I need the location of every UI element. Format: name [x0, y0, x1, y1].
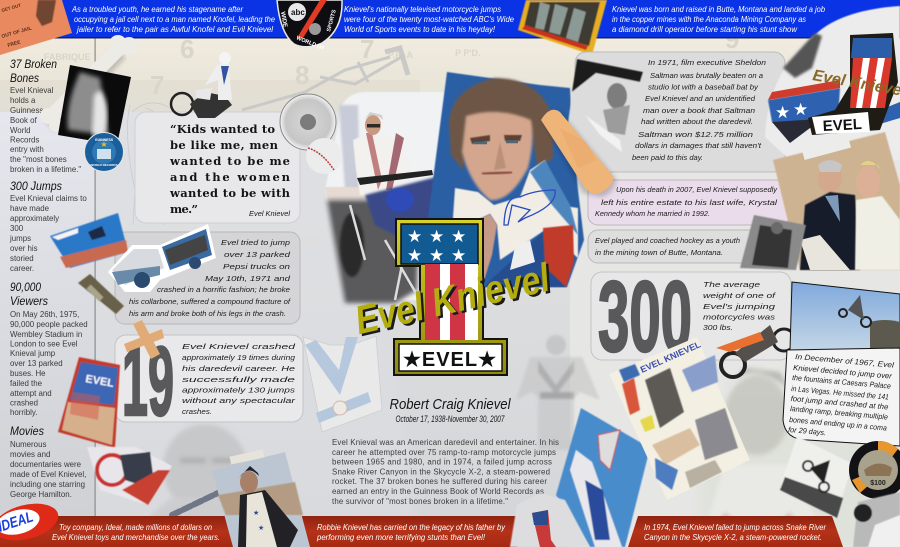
stat: 300: 300 — [598, 261, 692, 373]
text: biography: between 1965 and 1980, and in 1974, a failed jump across — [332, 458, 552, 466]
logo: Evel number 1: ★ — [407, 246, 422, 265]
stat block: viewers — [10, 282, 88, 417]
icon: bandage across portrait — [541, 110, 616, 197]
text: Saltman beating: studio lot with a baseball bat by — [648, 82, 759, 92]
ghost: caped stunt figure — [516, 335, 600, 450]
stat block: jumps: 300 — [10, 224, 24, 233]
icon: bone — [40, 35, 138, 132]
stat block: viewers: 90,000 — [10, 282, 42, 294]
stat block: movies: Movies — [10, 426, 44, 438]
text: Pepsi jump: his collarbone, suffered a compound fracture of — [129, 297, 291, 306]
stat block: jumps — [9, 181, 87, 273]
top banner text: stage name: As a troubled youth, he earned his stagename after — [71, 5, 243, 14]
stat block: viewers: On May 26th, 1975, — [10, 310, 79, 319]
quote text: “Kids wanted to — [170, 122, 275, 136]
logo: Evel number 1 — [351, 218, 557, 376]
text: biography — [332, 438, 559, 506]
icon: Wide World of Sports badge: WIDE — [279, 11, 288, 28]
photo: jump over cars — [780, 436, 853, 518]
text: hockey: Evel played and coached hockey as a youth — [595, 236, 740, 245]
panel: 19 crashes — [115, 326, 303, 436]
photo: wedding — [773, 132, 900, 270]
icon: silver hubcap — [280, 94, 336, 150]
stat block: viewers: buses. He — [10, 369, 46, 378]
stat block: viewers: 90,000 people packed — [10, 320, 88, 329]
background: P.R. A — [388, 50, 414, 60]
text: crashes: Evel Knievel crashed — [182, 342, 296, 351]
text: biography: earned an entry in the Guinness Book of World Records as — [332, 487, 544, 496]
stat block: broken bones: Evel Knieval — [10, 86, 54, 95]
text column: left statistics — [9, 59, 88, 499]
text: motorcycle weight: weight of one of — [703, 291, 776, 300]
icon: toy Pepsi truck — [108, 224, 216, 292]
stat block: movies: made of Evel Knievel, — [10, 470, 86, 479]
bottom text: Robbie Knievel — [316, 523, 506, 542]
photo: Robbie Knievel: ★ — [258, 524, 264, 532]
text: Caesars Palace jump: landing ramp, breaking multiple — [790, 404, 888, 422]
text: Saltman beating: Saltman was brutally beaten on a — [650, 71, 763, 80]
stat block: viewers: over 13 parked — [10, 359, 63, 368]
text: Pepsi jump: May 10th, 1971 and — [205, 274, 291, 283]
panel: hockey — [588, 230, 778, 263]
icon: DVD covers — [58, 357, 172, 505]
text: Saltman beating: had written about the daredevil. — [641, 117, 753, 126]
text: Saltman beating: In 1971, film executive Sheldon — [648, 58, 766, 67]
text: crashes: his daredevil career. He — [182, 364, 295, 373]
stat block: broken bones: the "most bones — [10, 155, 67, 164]
stat block: broken bones: Bones — [10, 73, 39, 85]
bottom text: Robbie Knievel: performing even more terrifying stunts than Evel! — [316, 533, 486, 542]
panel: 19 crashes: 19 — [122, 326, 174, 436]
stat block: broken bones: Book of — [10, 116, 38, 125]
text: last wife: Upon his death in 2007, Evel Knievel supposedly — [616, 185, 778, 194]
text: Saltman beating: man over a book that Saltman — [643, 106, 755, 115]
logo: Evel number 1: ★ — [407, 227, 422, 246]
stat block: jumps: storied — [10, 254, 34, 263]
top banner text: Butte: Knievel was born and raised in Butte, Montana and landed a job — [612, 5, 826, 14]
heading: Robert Craig Knievel: Robert Craig Knievel — [390, 396, 511, 413]
panel: quote — [135, 112, 300, 223]
bottom text: Ideal toys: Evel Knievel toys and merchandise over the years. — [52, 533, 220, 542]
text: biography: rocket. The 37 broken bones he suffered during his career — [332, 477, 547, 486]
stat block: jumps: career. — [10, 264, 34, 273]
top banner text: Wide World of Sports: Knievel's nationally televised motorcycle jumps — [344, 5, 501, 14]
background: FABRIQUE — [44, 52, 91, 62]
stat block: broken bones: World — [10, 126, 30, 135]
icon: Wide World of Sports badge: WORLD OF — [295, 35, 326, 52]
photo: cape with number 1 — [510, 493, 590, 547]
quote text: wanted to be me — [169, 154, 290, 168]
top banner text: stage name: jailer to refer to the pair as Awful Knofel and Evil Knievel — [76, 25, 273, 34]
photo: Skycycle rocket — [556, 408, 650, 547]
text: Saltman beating — [632, 58, 766, 162]
stat block: movies: Numerous — [10, 440, 46, 449]
stat block: broken bones: Records — [10, 136, 39, 144]
heading: Robert Craig Knievel — [390, 396, 511, 425]
top banner text: Wide World of Sports: were four of the twenty most-watched ABC's Wide — [344, 15, 515, 24]
photo: old Evel on motorcycle — [325, 92, 445, 303]
main portrait — [428, 72, 584, 287]
photo: Saltman in hospital — [567, 59, 643, 155]
bottom text: Ideal toys — [52, 523, 220, 542]
stat block: jumps: have made — [10, 204, 50, 213]
quote attribution: Evel Knievel — [249, 209, 290, 218]
icon: helmet: EVEL — [822, 116, 862, 135]
stat block: viewers: Wembley Stadium in — [10, 330, 82, 339]
stat block: movies: documentaries were — [10, 460, 82, 469]
text: Caesars Palace jump: for 29 days. — [788, 425, 826, 437]
text: Saltman beating: been paid to this day. — [632, 153, 703, 162]
panel: Caesars Palace text — [783, 348, 900, 446]
icon: spark plug — [78, 274, 124, 314]
DVD cover: Evel Knievel: EVEL — [84, 373, 115, 390]
quote text: be like me, men — [170, 138, 279, 152]
stat block: movies: including one starring — [10, 480, 85, 489]
stat block: viewers: London to see Evel — [10, 340, 78, 348]
photo: hockey — [740, 215, 806, 270]
text: crashes: without any spectacular — [182, 396, 296, 405]
text: Caesars Palace jump — [788, 352, 895, 437]
text: Caesars Palace jump: In December of 1967, Evel — [795, 352, 895, 370]
stat block: jumps: Evel Knieval claims to — [10, 194, 87, 203]
EVEL plate: ★EVEL★ — [403, 349, 497, 371]
top banner — [50, 0, 900, 38]
text: Saltman beating: Saltman won $12.75 million — [638, 130, 753, 139]
stat block: broken bones: entry with — [10, 145, 44, 154]
text: crashes: successfully made — [182, 375, 295, 384]
comic: Stories of Evel Knievel: EVEL KNIEVEL — [639, 339, 703, 375]
icon: get out of jail ticket: OUT OF JAIL — [1, 26, 32, 40]
text: motorcycle weight: Evel's jumping — [703, 302, 776, 311]
photo: Caesars Palace jump — [790, 282, 900, 350]
background: 7 — [150, 70, 164, 100]
text: crashes — [182, 342, 296, 416]
stat block: jumps: jumps — [9, 234, 31, 243]
stat block: broken bones: broken in a lifetime." — [10, 165, 81, 174]
icon: Ideal logo — [0, 498, 62, 546]
text: Pepsi jump: Evel tried to jump — [221, 238, 290, 247]
stat block: viewers: crashed — [10, 398, 38, 408]
DVD cover: Evel Knievel — [58, 357, 120, 448]
ghost: pencil face sketch — [128, 103, 170, 225]
icon: Guinness World Records seal — [84, 132, 124, 172]
stat block: viewers: attempt and — [10, 389, 52, 398]
icon: Guinness World Records seal: WORLD RECORDS — [90, 163, 118, 167]
icon: Guinness World Records seal: GUINNESS — [95, 138, 114, 142]
text: motorcycle weight: 300 lbs. — [703, 323, 733, 332]
icon: Wide World of Sports badge — [277, 0, 342, 52]
icon: Guinness World Records seal: ★ — [100, 140, 108, 149]
stat block: viewers: Knieval jump — [10, 349, 56, 358]
icon: Caesars Palace chip — [849, 441, 900, 499]
panel: 300 lbs — [591, 261, 791, 373]
stat block: movies: George Hamilton. — [10, 490, 72, 499]
text: biography: Snake River Canyon in the Skycycle X-2, a steam-powered — [332, 468, 550, 476]
text: motorcycle weight: The average — [703, 280, 760, 289]
text: last wife: left his entire estate to his last wife, Krystal — [601, 198, 777, 207]
ghost: Evel face lower right — [700, 368, 830, 547]
stat block: viewers: failed the — [10, 379, 43, 388]
icon: baseball — [306, 138, 342, 174]
icon: Caesars Palace chip: $100 — [870, 480, 886, 487]
icon: bicycle chain — [172, 492, 220, 515]
stat block: jumps: approximately — [10, 214, 59, 223]
stat block: movies — [10, 426, 86, 499]
photo: jump over buses — [50, 213, 128, 268]
background: 9 — [725, 24, 739, 54]
DVD cover: Evel Knievel motorcycle — [87, 447, 172, 505]
icon: toy motorcycle rider — [171, 52, 232, 118]
text: Caesars Palace jump: Knievel decided to jump over — [793, 363, 893, 381]
background: 6 — [180, 34, 194, 64]
text: Pepsi jump: Pepsi trucks on — [223, 262, 290, 271]
icon: get out of jail ticket: FREE — [7, 39, 22, 49]
text: Pepsi jump: crashed in a horrific fashion; he broke — [157, 285, 290, 294]
text: hockey: in the mining town of Butte, Montana. — [595, 248, 723, 257]
text: biography: Evel Knieval was an American daredevil and entertainer. In his — [332, 438, 559, 447]
text: biography: the survivor of "most bones broken in a lifetime." — [332, 497, 508, 506]
icon: helmet — [765, 6, 900, 160]
bottom text: Robbie Knievel: Robbie Knievel has carried on the legacy of his father by — [317, 523, 506, 532]
top banner text: Butte — [612, 5, 826, 34]
top banner text: Wide World of Sports — [344, 5, 515, 34]
logo: Evel number 1: ★ — [429, 227, 444, 246]
text: Caesars Palace jump: bones and ending up in a coma — [789, 415, 887, 433]
script logotype: Evel Knievel — [351, 256, 555, 343]
text: motorcycle weight: motorcycles was — [703, 312, 775, 322]
text: last wife — [595, 185, 778, 218]
panel: last wife — [588, 180, 790, 225]
logo: Evel number 1: ★ — [451, 227, 466, 246]
text: Caesars Palace jump: in Las Vegas. He missed the 141 — [791, 384, 889, 402]
top banner text: Butte: a diamond drill operator before starting his stunt show — [612, 25, 798, 34]
text: Saltman beating: dollars in damages that still haven't — [635, 141, 762, 150]
text: Caesars Palace jump: the fountains at Caesars Palace — [792, 373, 891, 391]
icon: helmet: ★ — [775, 103, 790, 122]
text: Pepsi jump: his arm and broke both of his legs in the crash. — [129, 309, 286, 318]
icon: get out of jail ticket — [0, 0, 72, 55]
stat block: viewers: horribly. — [10, 408, 37, 417]
text: last wife: Kennedy whom he married in 1992. — [595, 209, 710, 218]
background: 8 — [295, 60, 309, 90]
text: Pepsi jump — [129, 238, 291, 318]
script logotype: Evel Knievel — [353, 258, 557, 345]
quote text: wanted to be with — [169, 186, 291, 200]
text: crashes: approximately 130 jumps — [182, 386, 295, 394]
logo: Evel number 1: ★ — [451, 246, 466, 265]
icon: helmet: ★ — [793, 100, 808, 119]
stat block: broken bones: 37 Broken — [10, 59, 57, 71]
bottom banner — [0, 516, 843, 547]
text: biography: career he attempted over 75 ramp-to-ramp motorcycle jumps — [332, 448, 556, 457]
stat block: broken bones: Guinness — [10, 106, 43, 115]
ghost: jumpsuit outline — [303, 336, 382, 432]
text: motorcycle weight — [703, 280, 776, 332]
icon: Wide World of Sports badge: SPORTS — [326, 9, 338, 33]
stat block: movies: movies and — [10, 450, 50, 459]
bottom text: Ideal toys: Toy company, Ideal, made millions of dollars on — [59, 523, 213, 532]
icon: Montana postcard — [518, 0, 607, 55]
text: hockey — [595, 236, 740, 257]
ghost: background Evel portrait — [150, 424, 268, 528]
logo: Evel number 1: ★ — [429, 246, 444, 265]
background: P P'D. — [455, 48, 480, 58]
photo: x-ray — [58, 65, 131, 145]
text: Caesars Palace jump: foot jump and crashed at the — [790, 394, 889, 412]
bottom text: Snake River: Canyon in the Skycycle X-2, a steam-powered rocket. — [644, 533, 822, 542]
bottom text: Snake River — [644, 523, 826, 542]
comic: Stories of Evel Knievel — [609, 337, 750, 500]
icon: get out of jail ticket: GET OUT — [1, 3, 22, 13]
top banner text: stage name: occupying a jail cell next to a man named Knofel, leading the — [74, 15, 276, 24]
stat block: viewers: Viewers — [10, 296, 48, 308]
text: Pepsi jump: over 13 parked — [224, 250, 291, 259]
quote text: me.” — [170, 202, 198, 216]
text: Saltman beating: Evel Knievel and an unidentified — [645, 94, 756, 103]
icon: crossed bandages — [124, 320, 164, 359]
stat block: broken bones — [10, 59, 81, 174]
text: crashes: approximately 19 times during — [182, 353, 296, 362]
stat block: broken bones: holds a — [10, 96, 36, 105]
top banner text: Wide World of Sports: World of Sports events to date in his heyday! — [344, 25, 496, 34]
icon: crutch — [242, 48, 408, 110]
photo: kids black and white — [853, 492, 900, 547]
background: 7 — [360, 34, 374, 64]
text: crashes: crashes. — [182, 407, 212, 416]
quote text: and the women — [170, 170, 291, 184]
stat block: jumps: 300 Jumps — [10, 181, 62, 193]
bottom text: Snake River: In 1974, Evel Knievel failed to jump across Snake River — [644, 523, 826, 532]
photo: orange motorcycle — [716, 325, 795, 377]
stat block: jumps: over his — [10, 244, 38, 253]
quote text — [169, 122, 291, 216]
photo: Robbie Knievel — [212, 450, 310, 547]
top banner text: Butte: in the copper mines with the Anaconda Mining Company as — [612, 15, 806, 24]
icon: Wide World of Sports badge: abc — [291, 8, 305, 17]
panel: Saltman — [575, 52, 785, 172]
heading: Robert Craig Knievel: October 17, 1938-November 30, 2007 — [396, 414, 505, 425]
top banner text: stage name — [71, 5, 276, 34]
panel: Pepsi jump — [115, 232, 300, 324]
photo: Robbie Knievel: ★ — [253, 509, 259, 517]
